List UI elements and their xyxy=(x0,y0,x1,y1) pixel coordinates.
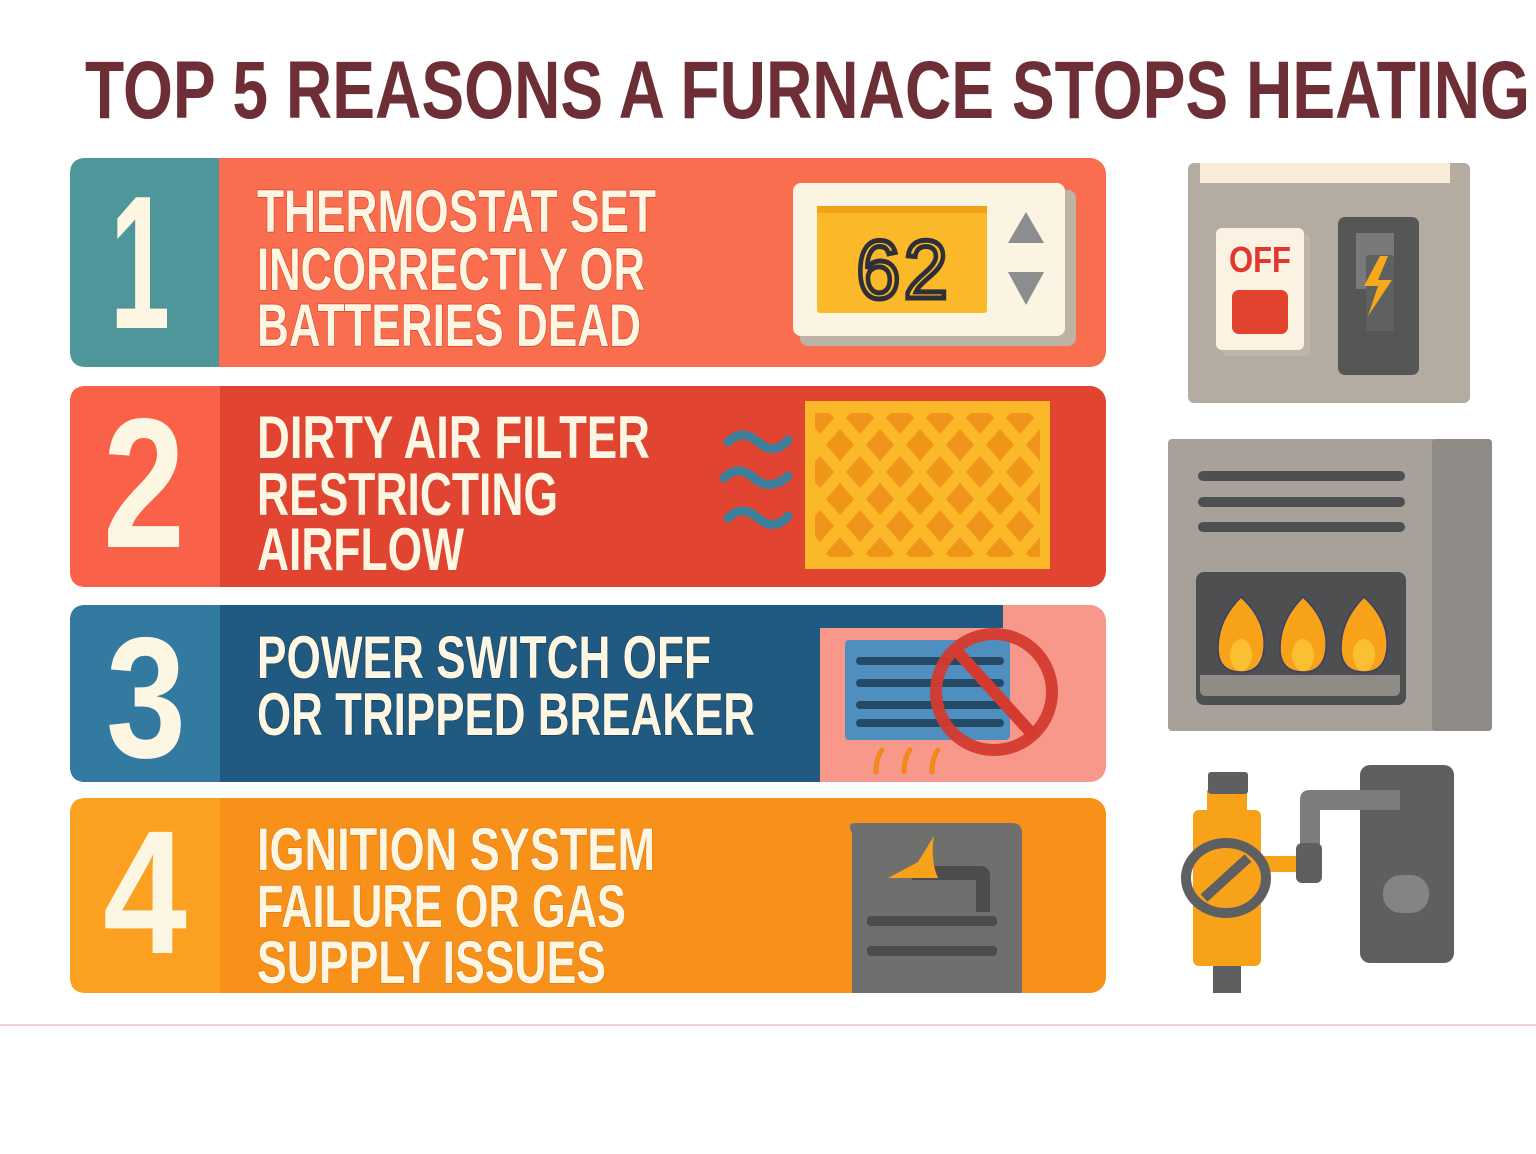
text: reason 2: RESTRICTING xyxy=(257,461,558,528)
text: reason 2: DIRTY AIR FILTER xyxy=(257,404,650,471)
text: reason 2 xyxy=(257,404,650,583)
number 1: 1 xyxy=(110,157,170,369)
icon: ignition unit xyxy=(850,823,1022,993)
text: reason 1 xyxy=(257,178,656,359)
icon: gas valve and meter xyxy=(1186,765,1454,993)
icon: breaker panel xyxy=(1188,163,1470,403)
panel: reason 4 xyxy=(70,795,1106,996)
icon: air waves xyxy=(724,435,788,525)
icon: thermostat xyxy=(793,183,1076,346)
text: reason 3: POWER SWITCH OFF xyxy=(257,624,711,691)
divider line xyxy=(0,1024,1536,1026)
text: reason 4: FAILURE OR GAS xyxy=(257,873,626,940)
icon: furnace with flames xyxy=(1168,439,1492,731)
panel: reason 2 xyxy=(70,386,1106,587)
text: reason 3 xyxy=(257,624,755,748)
text: reason 4: SUPPLY ISSUES xyxy=(257,929,606,996)
panel: reason 3 xyxy=(70,602,1106,794)
text: reason 3: OR TRIPPED BREAKER xyxy=(257,681,755,748)
icon: breaker panel: OFF xyxy=(1229,239,1291,280)
icon: vent with prohibition xyxy=(845,634,1052,772)
text: reason 1: THERMOSTAT SET xyxy=(257,178,656,245)
text: reason 4 xyxy=(257,816,655,996)
icon: thermostat: 62 xyxy=(854,226,950,324)
text: reason 2: AIRFLOW xyxy=(257,516,464,583)
panel: reason 1 xyxy=(70,157,1106,369)
icon: air filter xyxy=(805,401,1050,569)
number 4: 4 xyxy=(103,795,187,991)
text: reason 1: BATTERIES DEAD xyxy=(257,292,641,359)
number 2: 2 xyxy=(103,381,185,587)
text: reason 1: INCORRECTLY OR xyxy=(257,236,645,303)
text: reason 4: IGNITION SYSTEM xyxy=(257,816,655,883)
number 3: 3 xyxy=(106,602,186,794)
